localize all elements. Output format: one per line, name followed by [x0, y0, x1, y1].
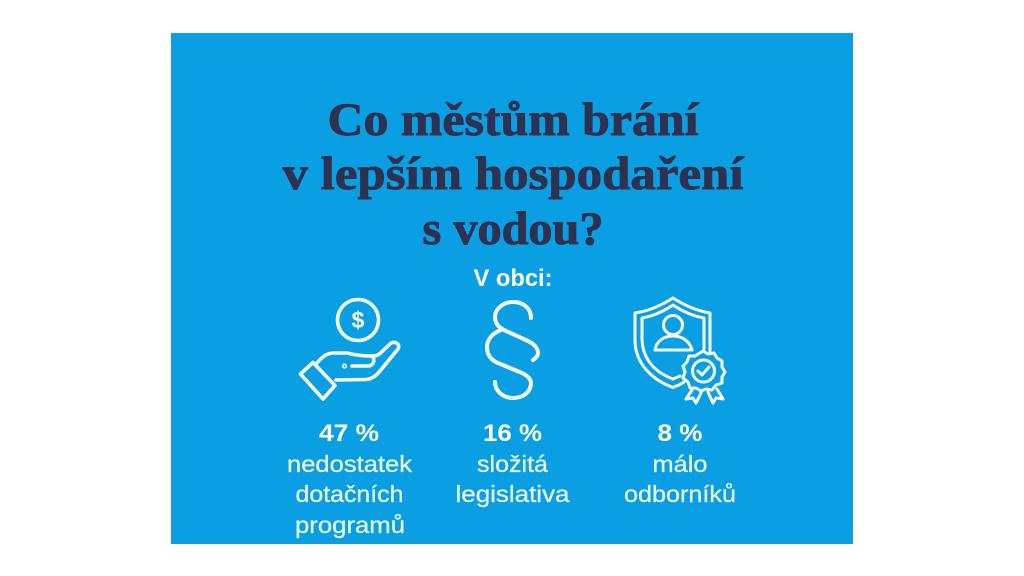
stat: 47 % nedostatek dotačních programů: nedostatek [287, 451, 413, 477]
stat: 16 % složitá legislativa: legislativa [456, 481, 570, 507]
icon: hand with coin [300, 300, 399, 399]
stat: 8 % málo odborníků [624, 420, 736, 507]
icon: paragraph sign [487, 302, 538, 398]
stat: 47 % nedostatek dotačních programů: programů [295, 512, 405, 538]
stat: 16 % složitá legislativa: složitá [477, 451, 548, 477]
stat: 47 % nedostatek dotačních programů: dotačních [296, 481, 404, 507]
stat: 47 % nedostatek dotačních programů [287, 420, 413, 538]
icon: hand with coin: $ [352, 307, 365, 333]
stat: 8 % málo odborníků: málo [652, 451, 708, 477]
title: Co městům brání [328, 94, 699, 146]
stat: 8 % málo odborníků: odborníků [624, 481, 736, 507]
subheading: V obci: V obci: [474, 265, 552, 292]
stat: 16 % složitá legislativa: 16 % [483, 420, 542, 447]
title [282, 94, 745, 255]
icon: shield with person and badge [635, 298, 725, 403]
stat: 47 % nedostatek dotačních programů: 47 % [319, 420, 379, 447]
panel: blue background [171, 33, 853, 544]
title: s vodou? [422, 203, 604, 255]
title: v lepším hospodaření [282, 148, 745, 200]
stat: 8 % málo odborníků: 8 % [658, 420, 702, 447]
stat: 16 % složitá legislativa [456, 420, 570, 507]
